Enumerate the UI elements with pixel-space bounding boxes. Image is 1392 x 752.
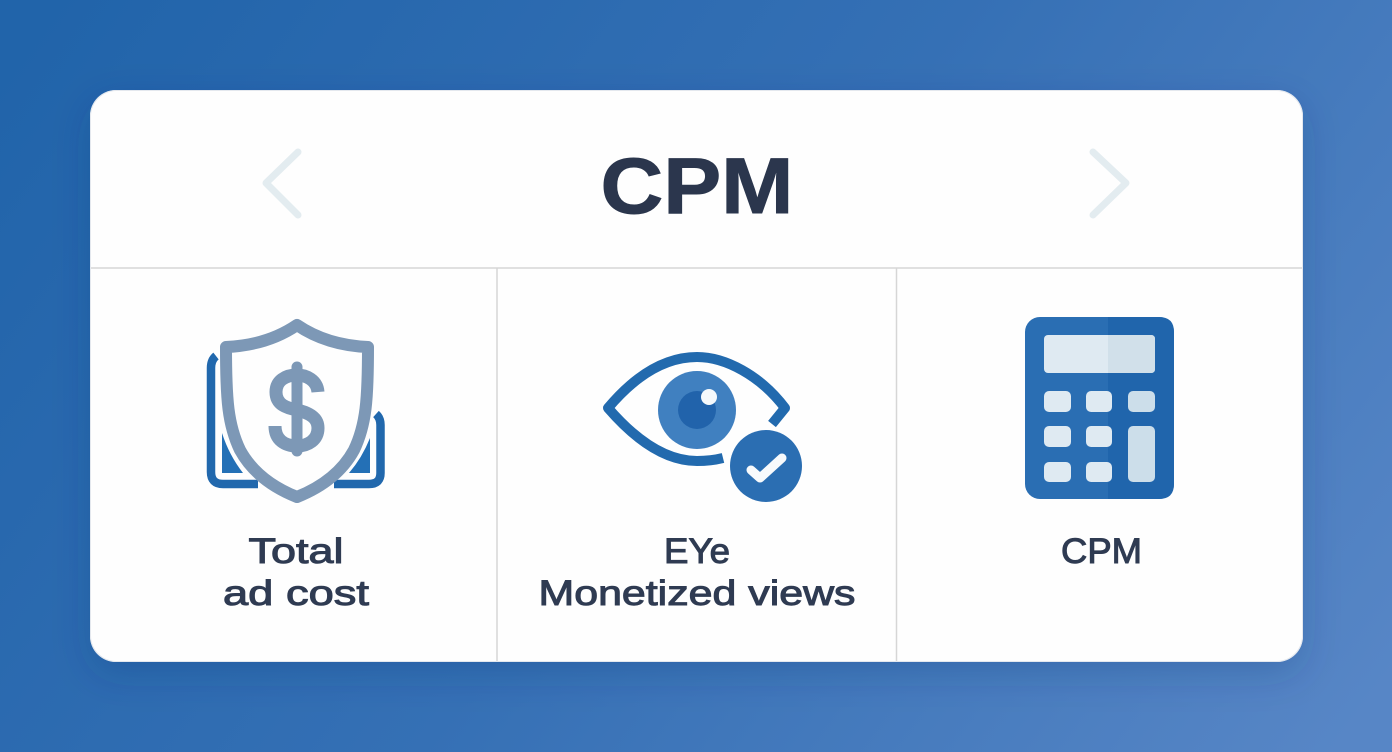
panel: CPM card — [90, 90, 1303, 662]
label: EYe Monetized views: EYe — [664, 532, 730, 571]
label: Total ad cost: ad cost — [223, 574, 369, 613]
icon: calculator — [1025, 317, 1174, 499]
label: Total ad cost — [223, 532, 369, 613]
label: EYe Monetized views — [538, 532, 856, 613]
icon: eye with check badge — [608, 357, 802, 502]
arrow: next — [1093, 152, 1126, 215]
label: CPM: CPM — [1061, 532, 1142, 571]
arrow: previous — [266, 152, 298, 215]
label: Total ad cost: Total — [248, 532, 344, 571]
label: EYe Monetized views: Monetized views — [538, 574, 856, 613]
icon: shield with dollar and banknotes — [211, 325, 380, 497]
title: CPM — [600, 141, 794, 230]
